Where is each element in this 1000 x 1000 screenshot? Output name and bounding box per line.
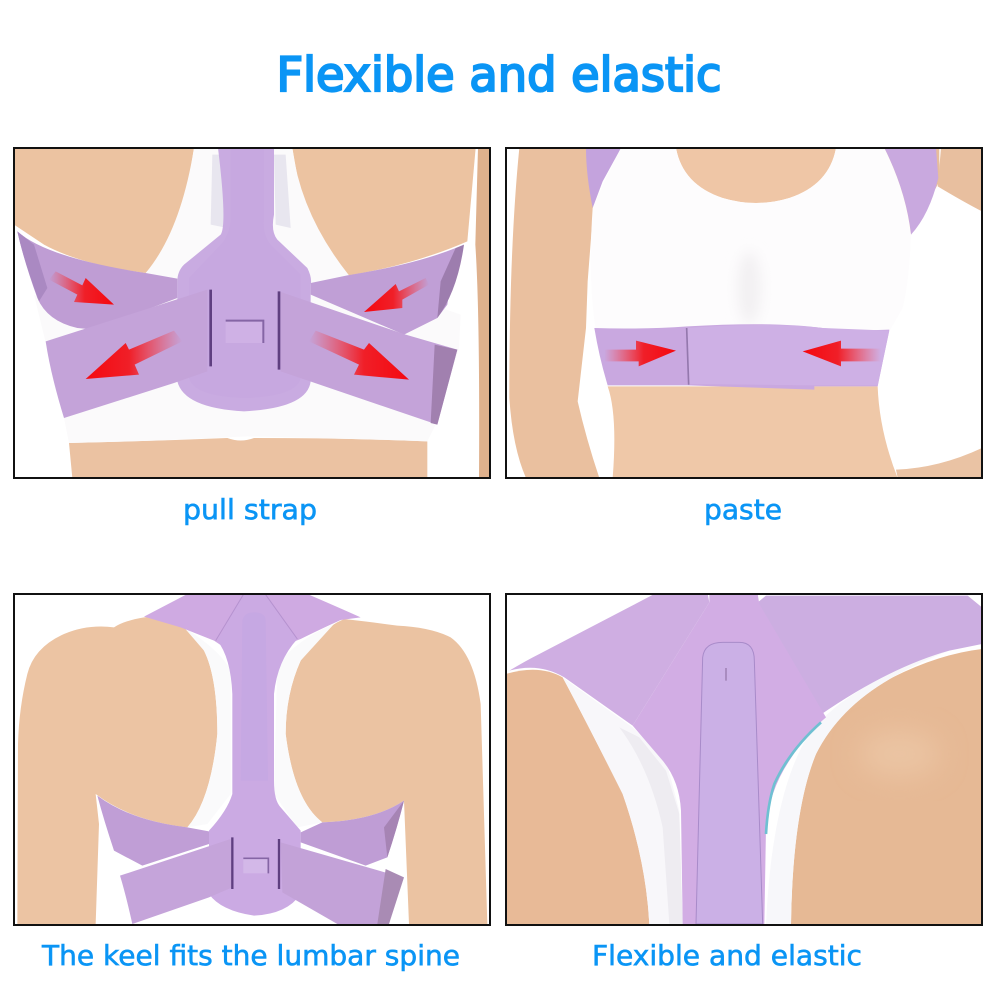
window [226,321,263,343]
skin behind straps [884,148,939,235]
right shoulder and arm [286,619,487,924]
right strap [758,596,982,716]
right strap [884,148,938,235]
white padding right [766,651,949,924]
keel ridge [696,642,763,924]
left shoulder and arm [17,617,217,924]
white padding left [563,677,683,924]
upper right band [311,248,456,335]
strap end flap [377,869,404,924]
white bra left [186,629,218,827]
title: Flexible and elastic [276,48,722,103]
hand [896,448,982,478]
strap end flap [431,345,457,425]
white bra [591,149,911,237]
waist strap [594,324,889,390]
lower right band [310,302,458,425]
left arm [509,148,599,478]
keel plate [633,594,826,924]
arrows [49,271,429,380]
caption: paste: paste [704,493,782,526]
back skin right [292,148,476,275]
slots and window [232,837,279,889]
panel: pull strap photo [14,148,490,479]
lower back skin [69,438,427,478]
panel frame [14,594,490,925]
neck skin [676,148,836,203]
shoulder strap [144,595,360,645]
upper right band [301,801,404,866]
right skin [791,649,982,924]
caption: flexible and elastic: Flexible and elastic [592,939,862,972]
lower left band [120,839,232,924]
caption: keel: The keel fits the lumbar spine [41,939,460,972]
panel frame [506,594,982,925]
back skin left [14,148,194,273]
right forearm [938,148,982,211]
caption: pull strap: pull strap [183,493,317,526]
right arm [475,148,490,478]
keel plate [209,640,301,916]
teal edge [766,722,821,834]
strap seams [216,595,297,641]
arrows [604,341,881,366]
keel ridge [241,612,268,781]
panel: flexible close-up photo [506,594,982,925]
ridge mark [725,668,727,681]
strap overlap [815,327,890,376]
lower torso [608,386,898,478]
panel: keel photo [14,594,490,925]
panel frame [14,148,490,478]
lower left band [46,299,178,418]
left strap [509,594,709,726]
upper left band [97,796,209,866]
panel: paste photo [506,148,982,479]
left strap [586,148,621,208]
keel plate [177,148,311,411]
white bra right [286,624,334,822]
upper left band [17,231,177,330]
left skin [506,670,649,924]
white bra [72,149,427,443]
panel frame [506,148,982,478]
slots [211,290,279,370]
lower right band [281,842,402,924]
